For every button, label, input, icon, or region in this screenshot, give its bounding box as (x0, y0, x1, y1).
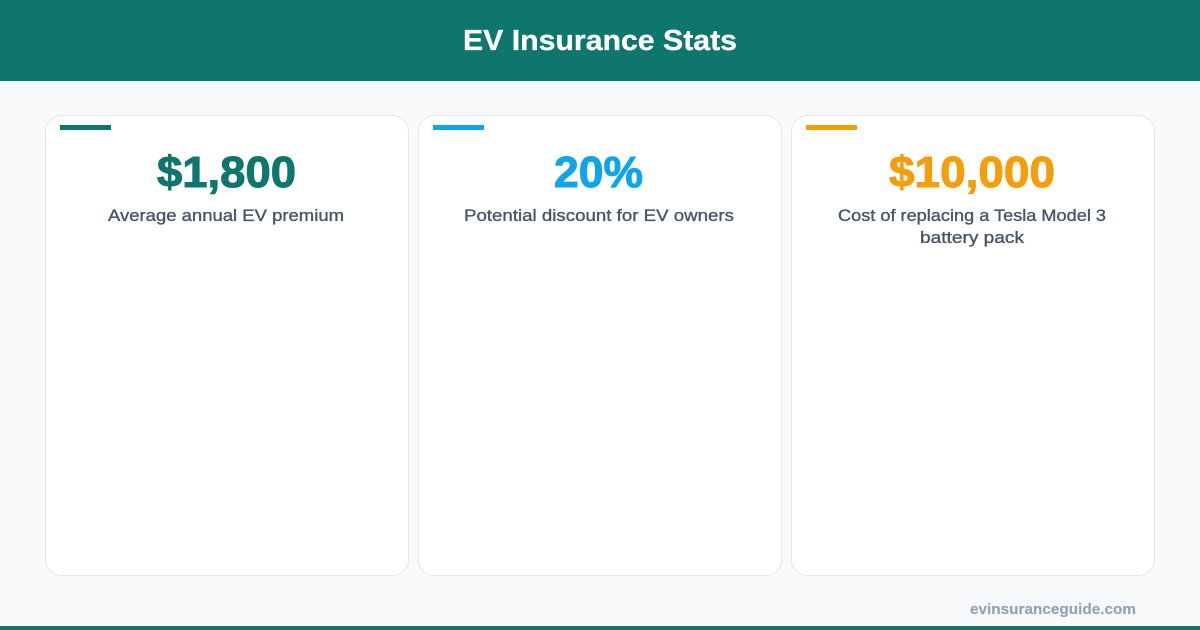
description: battery cost: battery pack (920, 229, 1025, 247)
stat: $10,000: $10,000 (889, 148, 1055, 197)
accent bar: amber (806, 125, 857, 130)
description: battery cost (838, 207, 1106, 247)
description: battery cost: Cost of replacing a Tesla Model 3 (838, 207, 1106, 225)
source credit: evinsuranceguide.com (970, 601, 1136, 618)
accent bar: blue (433, 125, 484, 130)
stat: $1,800: $1,800 (157, 148, 296, 197)
panel: average annual premium (46, 116, 408, 576)
description: discount: Potential discount for EV owners (464, 207, 734, 225)
stat: 20%: 20% (554, 148, 643, 197)
panel: battery replacement cost (792, 116, 1154, 576)
title: EV Insurance Stats (463, 25, 737, 57)
bottom bar (0, 626, 1200, 630)
panel: potential discount (418, 116, 782, 576)
header banner (0, 0, 1200, 81)
description: premium: Average annual EV premium (108, 207, 344, 225)
accent bar: teal (60, 125, 111, 130)
